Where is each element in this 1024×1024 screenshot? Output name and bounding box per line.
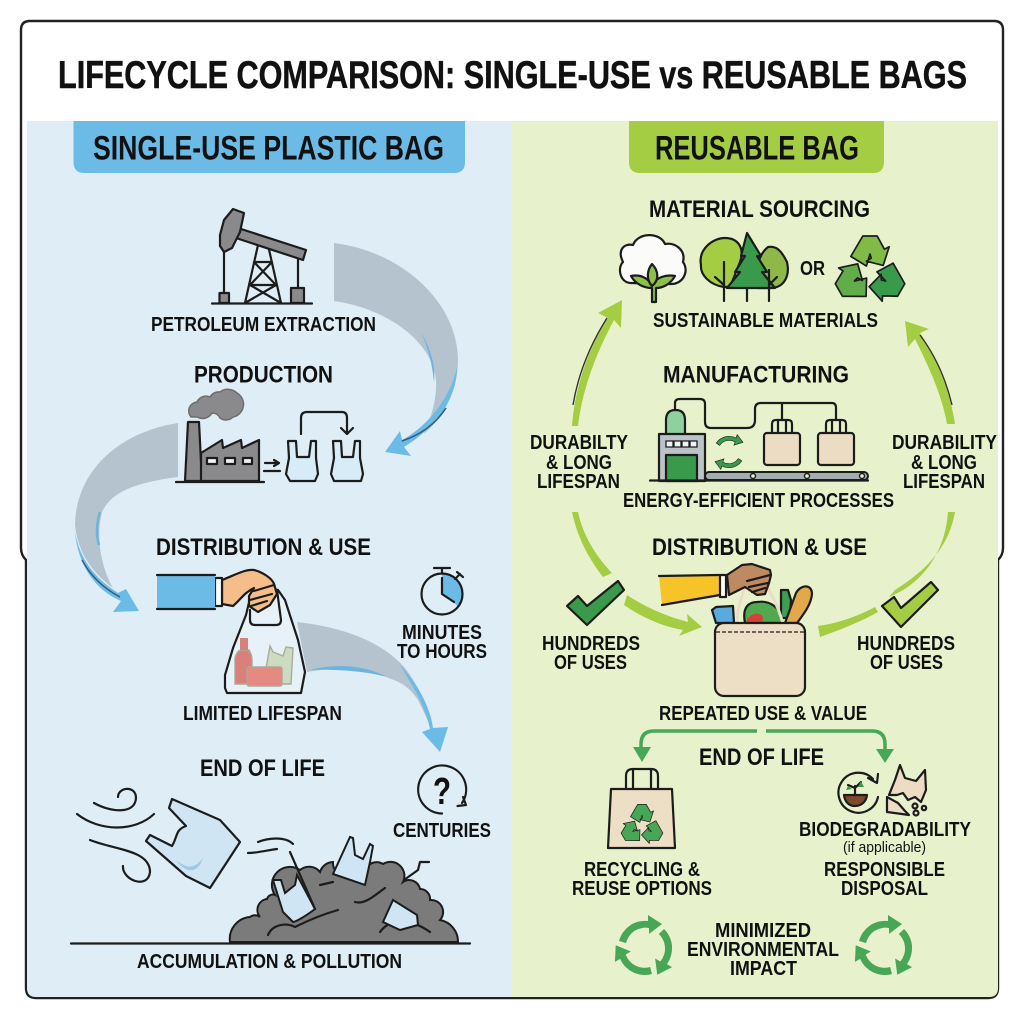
label: minutes to hours bbox=[397, 621, 487, 663]
heading: reusable bag bbox=[629, 121, 884, 173]
panel: reusable bag bbox=[512, 121, 998, 997]
heading: reusable bag: REUSABLE BAG bbox=[655, 130, 859, 168]
icon: centuries question clock bbox=[418, 766, 466, 814]
panel: single-use plastic bag bbox=[27, 121, 512, 997]
heading: single-use plastic bag: SINGLE-USE PLASTIC BAG bbox=[93, 130, 444, 168]
arrow: left cycle down to bag bbox=[572, 512, 702, 636]
label: minimized environmental impact: ENVIRONMENTAL bbox=[687, 938, 839, 961]
arrow: extraction to production bbox=[334, 243, 458, 456]
label: if applicable: (if applicable) bbox=[843, 840, 926, 856]
label: minimized environmental impact: IMPACT bbox=[730, 957, 797, 980]
label: hundreds of uses left: HUNDREDS bbox=[542, 632, 640, 655]
label: recycling and reuse options: RECYCLING & bbox=[584, 858, 700, 881]
label: petroleum extraction: PETROLEUM EXTRACTION bbox=[151, 313, 376, 336]
label: or: OR bbox=[800, 257, 825, 280]
label: durabilty and long lifespan left: & LONG bbox=[546, 451, 612, 474]
label: durability and long lifespan right: LIFESPAN bbox=[903, 470, 985, 493]
label: recycling and reuse options: REUSE OPTIONS bbox=[572, 877, 712, 900]
icon: biodegrading seedling bbox=[838, 773, 878, 813]
label: energy-efficient processes: ENERGY-EFFICIENT PROCESSES bbox=[623, 489, 894, 512]
label: distribution and use: DISTRIBUTION & USE bbox=[652, 534, 867, 561]
arrow: use to end of life bbox=[297, 622, 448, 752]
label: responsible disposal: DISPOSAL bbox=[841, 877, 928, 900]
label: hundreds of uses left bbox=[542, 632, 640, 674]
icon: stopwatch bbox=[422, 568, 463, 614]
label: material sourcing: MATERIAL SOURCING bbox=[649, 196, 870, 223]
panel background: left bbox=[27, 121, 512, 997]
icon: cotton plant bbox=[620, 235, 686, 302]
label: production: PRODUCTION bbox=[194, 362, 333, 388]
icon: landfill pile bbox=[71, 837, 470, 944]
label: durability and long lifespan right bbox=[892, 431, 997, 493]
label: minutes to hours: TO HOURS bbox=[397, 640, 487, 663]
icon: cycle arrows right bbox=[848, 915, 927, 987]
icon: centuries question clock: ? bbox=[433, 771, 451, 813]
label: minutes to hours: MINUTES bbox=[402, 621, 482, 644]
icon: bag manufacturing line bbox=[650, 399, 868, 481]
label: centuries: CENTURIES bbox=[393, 819, 491, 842]
heading: single-use plastic bag bbox=[74, 121, 465, 173]
arrow: end of life branches bbox=[633, 731, 894, 763]
label: responsible disposal bbox=[824, 858, 945, 900]
label: minimized environmental impact: MINIMIZED bbox=[715, 919, 811, 942]
label: durabilty and long lifespan left: LIFESPAN bbox=[537, 470, 620, 493]
label: biodegradability: BIODEGRADABILITY bbox=[799, 818, 971, 841]
label: minimized environmental impact bbox=[687, 919, 839, 980]
label: durability and long lifespan right: & LONG bbox=[911, 451, 977, 474]
icon: recycling tote bbox=[608, 769, 675, 848]
icon: trees bbox=[701, 233, 788, 301]
arrow: production to distribution bbox=[75, 423, 178, 612]
icon: wind-blown bag bbox=[77, 789, 293, 888]
icon: factory bbox=[176, 389, 280, 482]
label: repeated use and value: REPEATED USE & VALUE bbox=[659, 702, 867, 725]
icon: degrading bag bbox=[887, 765, 926, 816]
arrow: right cycle down from durability bbox=[818, 512, 955, 637]
icon: two plastic bags bbox=[286, 412, 363, 481]
arrow: right cycle up to sourcing bbox=[905, 321, 955, 424]
icon: recycling symbol bbox=[829, 236, 911, 307]
label: hundreds of uses right: HUNDREDS bbox=[857, 632, 955, 655]
icon: check left bbox=[567, 581, 624, 625]
label: durabilty and long lifespan left: DURABILTY bbox=[530, 431, 628, 454]
icon: check right bbox=[882, 582, 938, 627]
label: hundreds of uses left: OF USES bbox=[554, 651, 627, 674]
label: durabilty and long lifespan left bbox=[530, 431, 628, 493]
label: accumulation and pollution: ACCUMULATION & POLLUTION bbox=[137, 950, 402, 973]
icon: hand holding tote with groceries bbox=[659, 564, 812, 696]
icon: cycle arrows left bbox=[608, 915, 687, 987]
label: responsible disposal: RESPONSIBLE bbox=[824, 858, 945, 881]
label: durability and long lifespan right: DURABILITY bbox=[892, 431, 997, 454]
label: sustainable materials: SUSTAINABLE MATERIALS bbox=[653, 309, 878, 332]
label: end of life: END OF LIFE bbox=[200, 755, 325, 782]
label: end of life: END OF LIFE bbox=[699, 744, 824, 771]
icon: oil pump jack bbox=[212, 209, 312, 304]
label: recycling and reuse options bbox=[572, 858, 712, 900]
label: hundreds of uses right bbox=[857, 632, 955, 674]
panel background: right bbox=[512, 121, 998, 997]
label: distribution and use: DISTRIBUTION & USE bbox=[156, 534, 371, 561]
icon: hand holding plastic bag bbox=[157, 570, 305, 693]
label: limited lifespan: LIMITED LIFESPAN bbox=[183, 702, 342, 725]
label: hundreds of uses right: OF USES bbox=[870, 651, 943, 674]
label: manufacturing: MANUFACTURING bbox=[663, 362, 849, 388]
arrow: left cycle up to sourcing bbox=[572, 300, 622, 426]
